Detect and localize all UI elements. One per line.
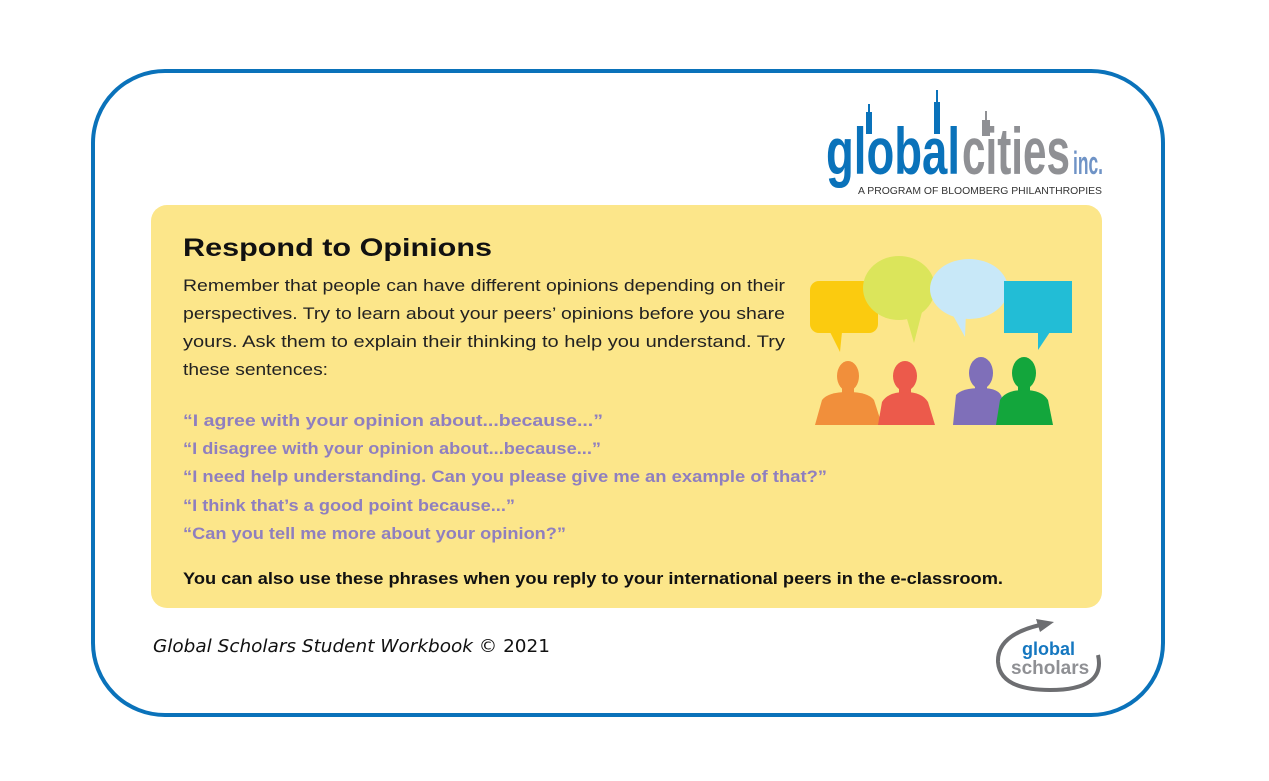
example sentences: “I think that’s a good point because...” — [183, 496, 515, 515]
heading: Respond to Opinions — [183, 234, 492, 262]
outer rounded frame — [93, 71, 1163, 715]
lime bubble — [863, 256, 935, 343]
logo: global scholars: global — [1022, 639, 1075, 659]
example sentences: “Can you tell me more about your opinion?” — [183, 524, 566, 543]
logo: global cities inc: global — [826, 114, 960, 188]
logo: global cities inc: inc. — [1073, 145, 1103, 181]
logo: global scholars: scholars — [1011, 658, 1089, 679]
body text: yours. Ask them to explain their thinking to help you understand. Try — [183, 332, 786, 351]
panel: yellow content box — [151, 205, 1102, 608]
cyan bubble — [1004, 281, 1072, 350]
skyline spires — [866, 104, 872, 134]
example sentences: “I agree with your opinion about...because...” — [183, 411, 603, 430]
yellow bubble — [810, 281, 878, 352]
body text: Remember that people can have different opinions depending on their — [183, 276, 785, 295]
purple person — [953, 357, 1002, 425]
red person — [878, 361, 935, 425]
logo: global cities inc: A PROGRAM OF BLOOMBERG PHILANTHROPIES — [858, 186, 1102, 197]
logo: global scholars — [998, 619, 1099, 690]
example sentences: “I disagree with your opinion about...because...” — [183, 439, 601, 458]
body text — [183, 276, 786, 379]
orange person — [815, 361, 882, 425]
example sentences — [183, 411, 827, 543]
body text: perspectives. Try to learn about your peers’ opinions before you share — [183, 304, 785, 323]
logo: global cities inc: cities — [962, 114, 1070, 188]
logo: global cities inc — [826, 90, 1103, 197]
closing note: You can also use these phrases when you reply to your international peers in the e-classroom. — [183, 569, 1003, 588]
body text: these sentences: — [183, 360, 328, 379]
green person — [996, 357, 1053, 425]
illustration: people with speech bubbles — [810, 256, 1072, 425]
example sentences: “I need help understanding. Can you please give me an example of that?” — [183, 467, 827, 486]
footer credit: Global Scholars Student Workbook © 2021 — [153, 636, 550, 657]
light blue bubble — [930, 259, 1008, 337]
